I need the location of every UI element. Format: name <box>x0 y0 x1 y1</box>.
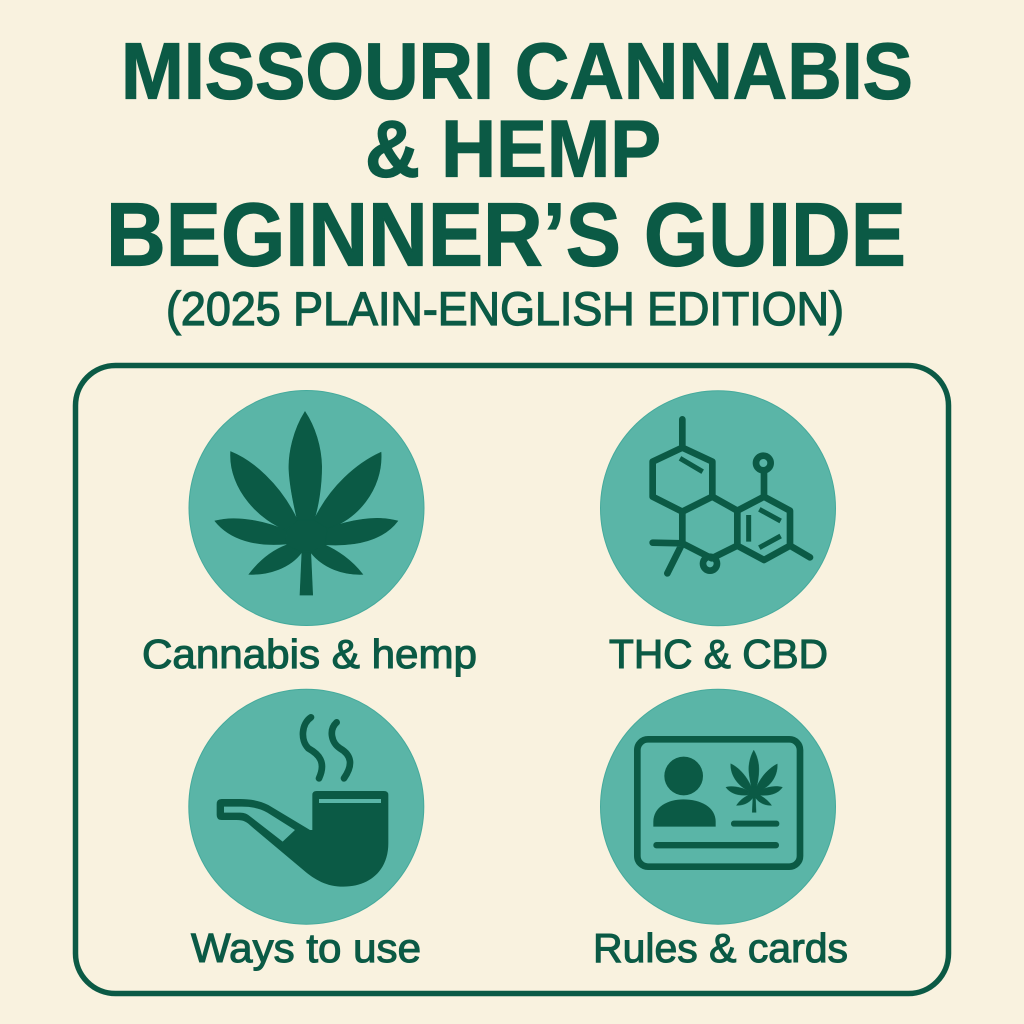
label: ways to use: Ways to use <box>191 925 421 971</box>
icon: cannabis leaf <box>189 390 424 626</box>
icon: pipe <box>189 689 424 924</box>
title: BEGINNER’S GUIDE <box>106 186 906 286</box>
icon: molecule <box>600 391 836 626</box>
icon: ID card <box>600 689 836 924</box>
subtitle: (2025 PLAIN-ENGLISH EDITION) <box>166 282 844 335</box>
title <box>106 26 913 286</box>
panel: topics <box>76 366 948 994</box>
label: rules and cards: Rules & cards <box>593 925 848 971</box>
title: MISSOURI CANNABIS <box>121 26 913 116</box>
title: & HEMP <box>365 104 661 194</box>
label: THC and CBD: THC & CBD <box>609 631 828 677</box>
label: cannabis and hemp: Cannabis & hemp <box>142 631 477 677</box>
